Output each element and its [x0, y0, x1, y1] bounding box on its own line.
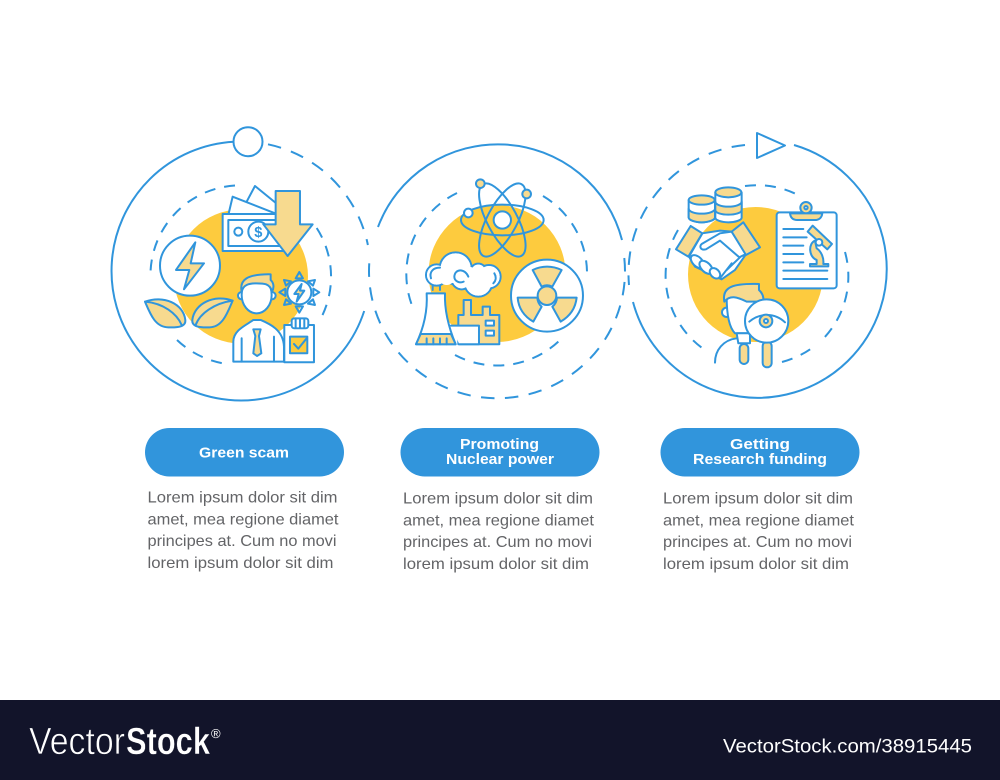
outer ring with circle marker [112, 127, 368, 401]
footer bar [0, 700, 1000, 780]
icon: banknotes [223, 186, 285, 251]
footer logo [29, 721, 221, 763]
icon: leaves [145, 298, 233, 327]
column 2: heading pill: Promoting [460, 436, 539, 453]
column 2: body text [403, 490, 595, 573]
icon: down arrow [263, 191, 313, 256]
yellow background circle [174, 210, 308, 344]
footer logo: Stock [126, 721, 211, 763]
column 2: body text: lorem ipsum dolor sit dim [403, 556, 589, 573]
panel: green scam [112, 127, 368, 401]
footer logo: ® [211, 726, 221, 741]
icon: banknotes: $ [254, 225, 262, 241]
column 2: heading pill: Nuclear power [446, 451, 554, 468]
inner dashed ring [406, 193, 587, 366]
outer ring with triangle marker [628, 133, 887, 398]
icon: green scam illustration [145, 186, 319, 362]
icon: clipboard with check [284, 318, 314, 362]
icon: nuclear illustration [416, 177, 583, 344]
icon: businessman [233, 274, 284, 362]
icon: clipboard with microscope [777, 202, 837, 288]
icon: handshake [676, 222, 760, 281]
panel: nuclear power [369, 144, 625, 398]
column 1: heading pill: Green scam [199, 444, 289, 462]
column 2: body text: Lorem ipsum dolor sit dim [403, 490, 593, 508]
icon: cloud of smoke [426, 252, 501, 297]
column 1: body text: Lorem ipsum dolor sit dim [148, 490, 338, 506]
column 1: body text [148, 490, 339, 572]
icon: radiation sign [511, 260, 583, 332]
column 3: body text: Lorem ipsum dolor sit dim [663, 490, 853, 508]
icon: research funding illustration [676, 187, 837, 367]
column 1: body text: lorem ipsum dolor sit dim [148, 555, 334, 572]
outer ring [369, 144, 625, 398]
icon: sun with bolt [279, 272, 319, 313]
column 2: body text: amet, mea regione diamet [403, 512, 595, 530]
column 3: heading pill [660, 428, 860, 476]
icon: cooling tower [416, 284, 456, 344]
footer url: VectorStock.com/38915445 [723, 736, 972, 758]
column 1: body text: amet, mea regione diamet [148, 512, 339, 528]
icon: atom [461, 177, 544, 263]
column 3: body text: amet, mea regione diamet [663, 512, 855, 530]
footer logo: Vector [29, 721, 125, 763]
column 3: heading pill: Getting [730, 436, 790, 453]
icon: researcher with magnifier [715, 284, 788, 367]
icon: factory [451, 300, 499, 344]
column 3: body text: lorem ipsum dolor sit dim [663, 556, 849, 573]
column 2: body text: principes at. Cum no movi [403, 534, 592, 551]
panel: research funding [628, 133, 887, 398]
column 1: body text: principes at. Cum no movi [148, 533, 336, 550]
inner dashed ring [150, 186, 331, 364]
yellow background circle [688, 207, 823, 342]
column 3: body text: principes at. Cum no movi [663, 534, 852, 551]
column 3: heading pill: Research funding [693, 451, 827, 468]
column 1: heading pill [145, 428, 344, 476]
icon: coin stacks [689, 187, 742, 222]
yellow background circle [428, 205, 566, 342]
column 2: heading pill [400, 428, 600, 476]
column 3: body text [663, 490, 855, 573]
icon: lightning circle [160, 236, 220, 296]
inner dashed ring [666, 185, 848, 362]
